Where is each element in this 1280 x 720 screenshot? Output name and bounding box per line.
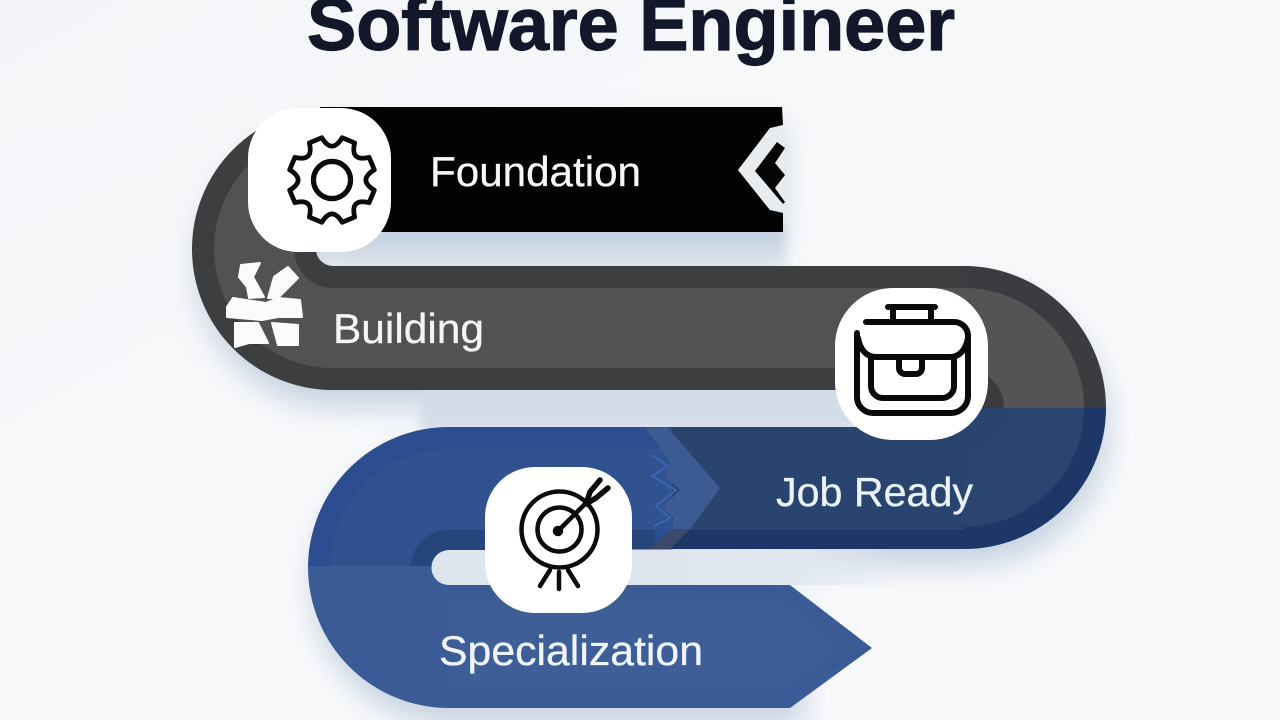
- icon tile: gear: [248, 108, 391, 252]
- icon: target: [522, 480, 608, 589]
- navy arc: [964, 408, 1044, 487]
- slot fade: [632, 550, 900, 585]
- label: Specialization: Specialization: [439, 627, 703, 674]
- icon: gear: [290, 138, 374, 222]
- step 3: job ready bar: [640, 408, 1044, 549]
- grey bar: [330, 266, 970, 390]
- chevron: [738, 128, 785, 212]
- label: Building: Building: [333, 305, 484, 352]
- icon tile: briefcase: [835, 288, 988, 440]
- step 2: building bar: [227, 263, 1044, 409]
- upper blue arc: [370, 489, 672, 568]
- lower blue arc: [308, 566, 872, 708]
- inner slot edge: [421, 540, 655, 568]
- black bar: [320, 107, 783, 232]
- icon tile: target: [485, 467, 632, 613]
- chevron: [645, 427, 720, 549]
- slot: [432, 550, 640, 585]
- icon: briefcase: [857, 307, 968, 413]
- label: Job Ready: Job Ready: [776, 469, 973, 515]
- navy bar: [640, 408, 1006, 549]
- step 1: foundation bar: [254, 107, 785, 328]
- grey connector arc: [254, 170, 340, 328]
- icon: broken blocks: [227, 263, 302, 347]
- step 4: specialization bar: [308, 427, 872, 708]
- right grey arc: [964, 328, 1044, 409]
- label: Foundation: Foundation: [430, 148, 641, 195]
